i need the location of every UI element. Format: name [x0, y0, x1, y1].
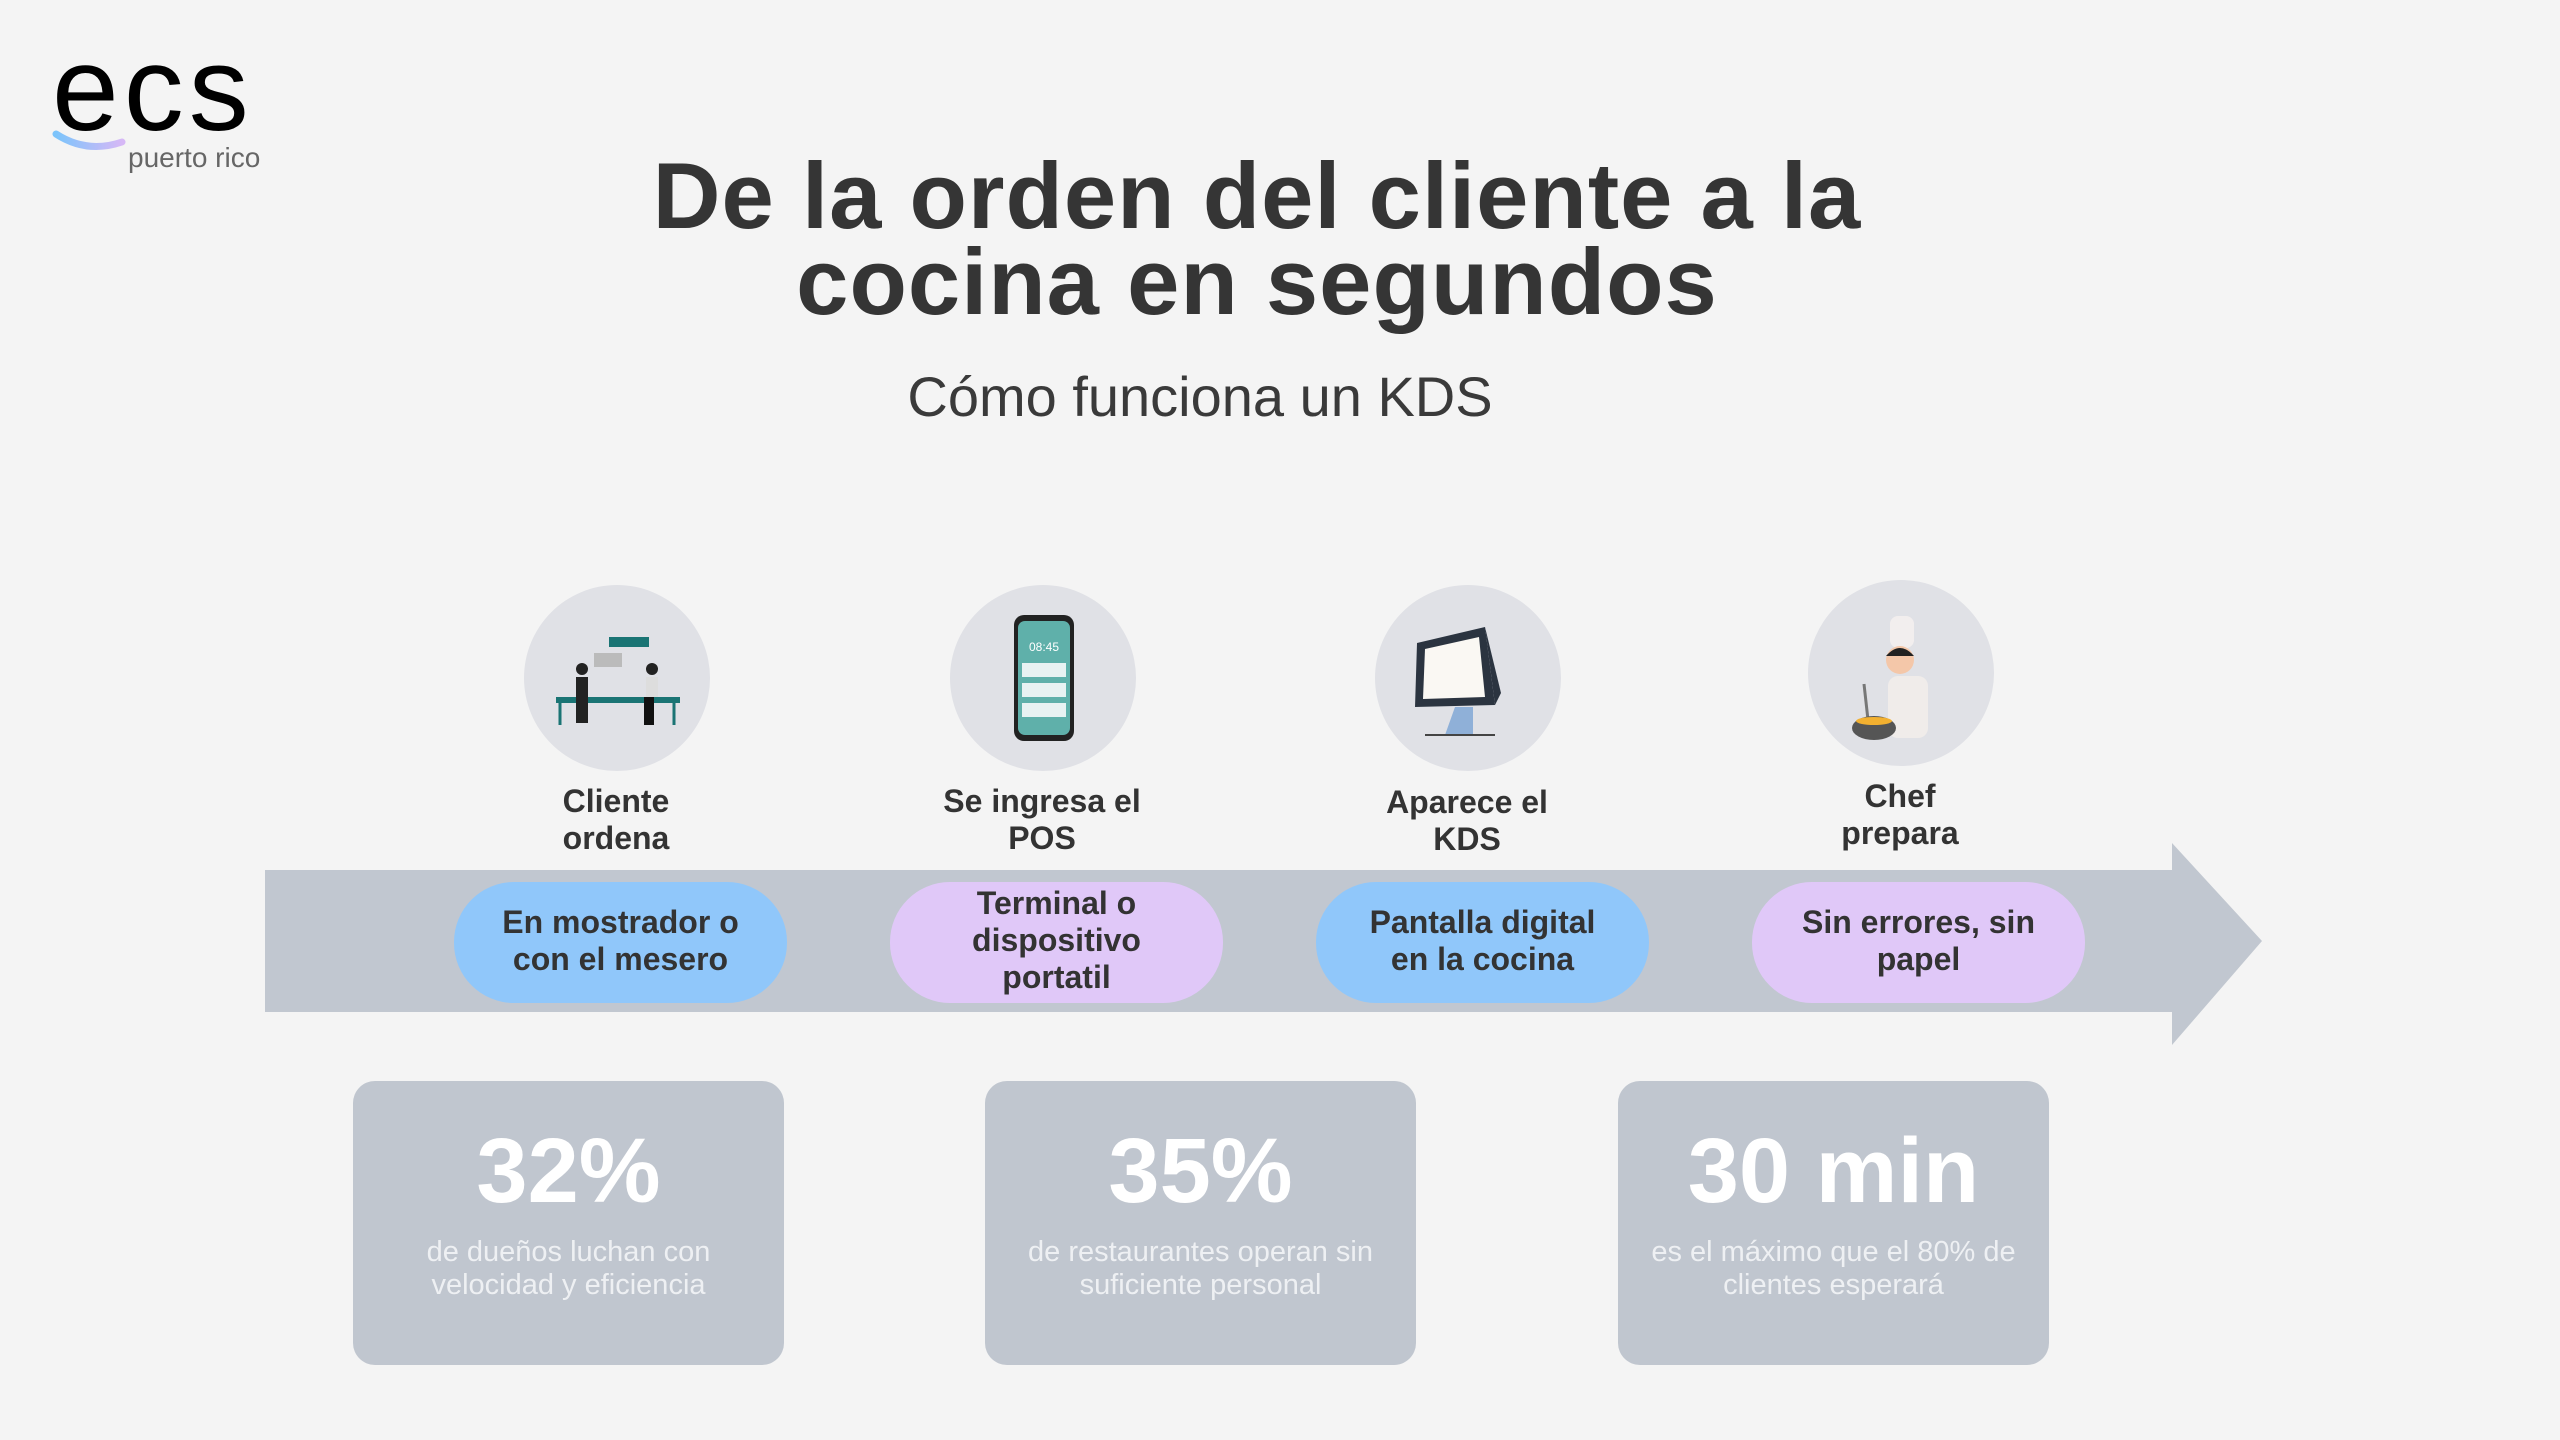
logo: puerto rico: [128, 142, 260, 173]
text: POS: [1008, 820, 1076, 856]
text: KDS: [1433, 821, 1501, 857]
text: 30 min: [1688, 1120, 1979, 1222]
step labels: ordena: [563, 820, 669, 856]
step labels: [563, 783, 670, 856]
text: Se ingresa el: [943, 783, 1141, 819]
step 2 icon: phone: 08:45: [1029, 640, 1059, 654]
text: papel: [1877, 940, 1960, 976]
step 4 icon: chef: [1808, 580, 1994, 766]
stat boxes: [353, 1081, 784, 1365]
text: dispositivo: [972, 922, 1141, 958]
text: Chef: [1864, 778, 1936, 814]
text: en la cocina: [1391, 940, 1574, 976]
title: De la orden del cliente a la: [653, 143, 1861, 248]
title: [653, 143, 1861, 334]
title: cocina en segundos: [796, 229, 1718, 334]
text: 35%: [1108, 1120, 1293, 1222]
text: suficiente personal: [1080, 1269, 1321, 1301]
text: Terminal o: [977, 885, 1136, 921]
subtitle: Cómo funciona un KDS: [907, 365, 1493, 428]
step labels: Cliente: [563, 783, 669, 819]
step 1 icon: people at table: [524, 585, 710, 771]
stat boxes: de dueños luchan con: [427, 1236, 710, 1268]
text: Pantalla digital: [1370, 904, 1595, 940]
text: Sin errores, sin: [1802, 904, 2035, 940]
text: portatil: [1002, 959, 1111, 995]
pills: En mostrador o: [502, 904, 739, 940]
logo: ecs: [52, 22, 254, 156]
step 3 icon: monitor: [1375, 585, 1561, 771]
text: es el máximo que el 80% de: [1651, 1236, 2016, 1268]
text: de restaurantes operan sin: [1028, 1236, 1373, 1268]
step 2 icon: phone: [950, 585, 1136, 771]
pills: [454, 882, 787, 1003]
stat boxes: velocidad y eficiencia: [431, 1269, 706, 1301]
text: prepara: [1841, 815, 1959, 851]
stat boxes: 32%: [476, 1120, 661, 1222]
pills: con el mesero: [513, 940, 728, 976]
text: Aparece el: [1386, 784, 1548, 820]
text: clientes esperará: [1723, 1269, 1944, 1301]
